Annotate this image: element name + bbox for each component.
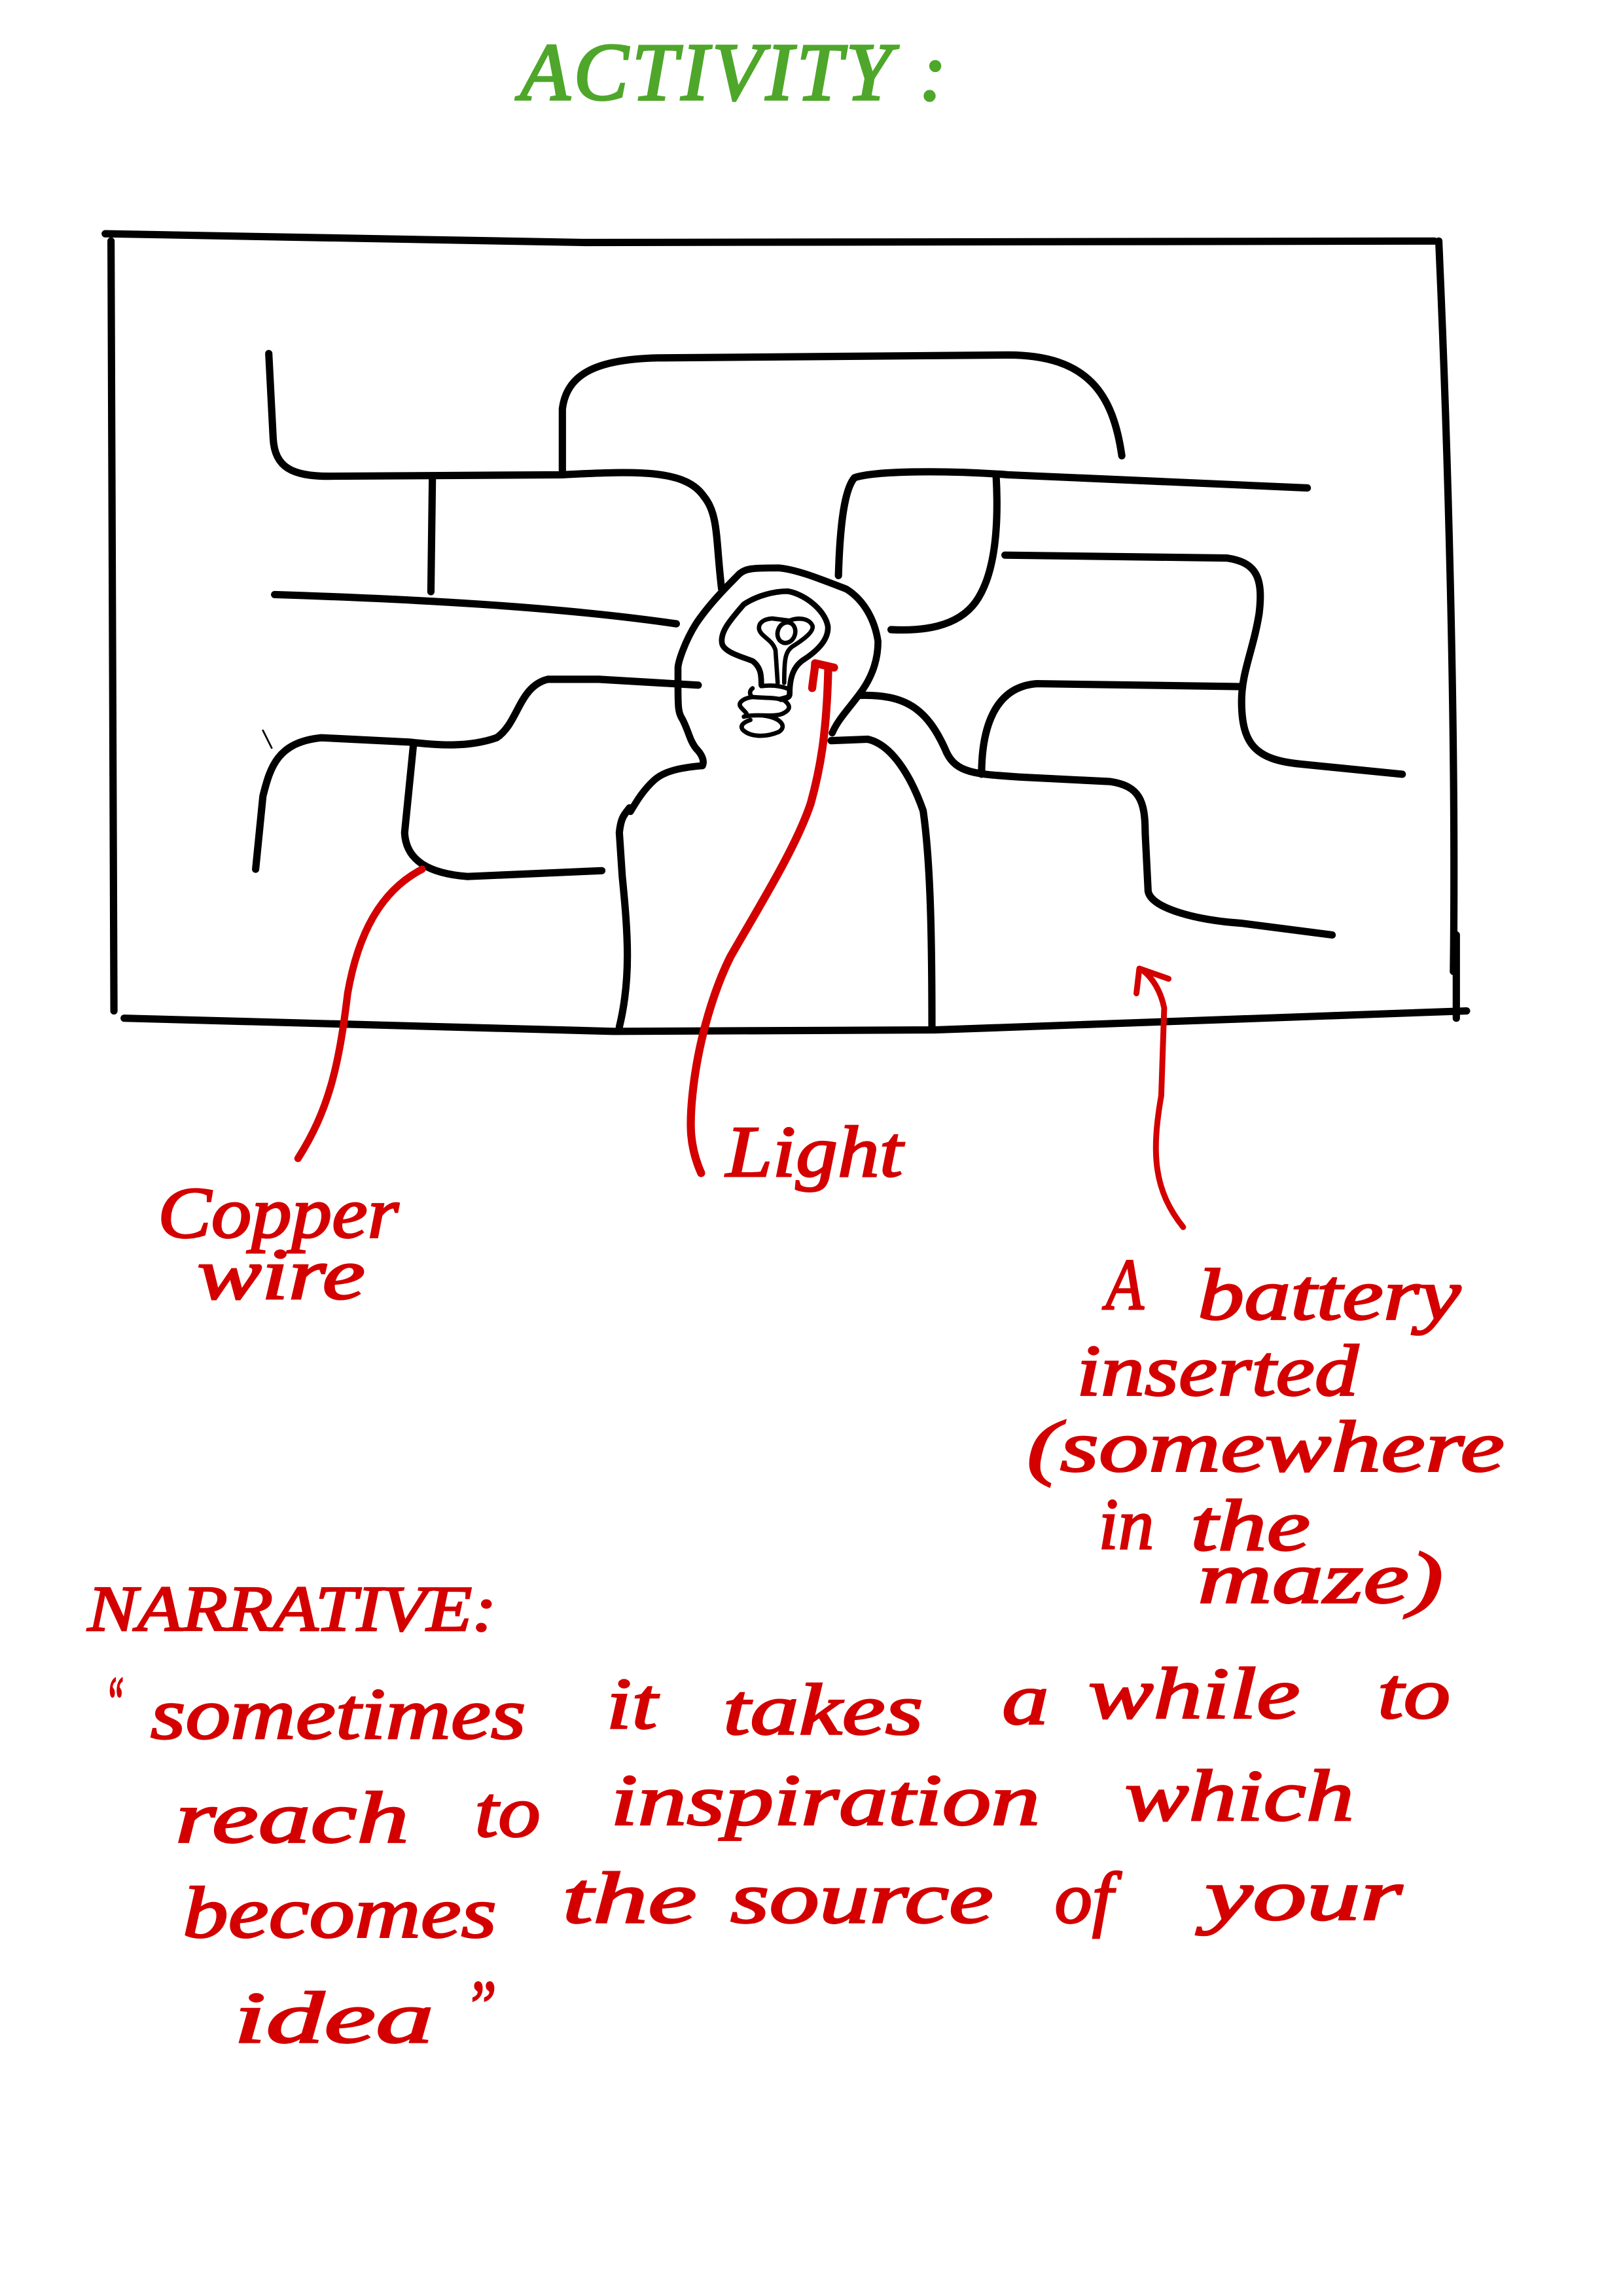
title: ACTIVITY: ACTIVITY : xyxy=(516,27,946,118)
arrow: copper wire pointer xyxy=(298,869,422,1158)
text block: narrative quote: while xyxy=(1088,1654,1300,1734)
label: battery note: A xyxy=(1102,1245,1144,1325)
arrow: light pointer xyxy=(690,663,834,1173)
icon: light bulb xyxy=(722,591,828,736)
panel: maze frame xyxy=(105,234,1467,1031)
text block: narrative quote: takes xyxy=(723,1670,923,1750)
text block: narrative quote: becomes xyxy=(183,1873,497,1954)
text block: narrative quote: sometimes xyxy=(151,1674,526,1755)
heading: narrative: NARRATIVE: xyxy=(87,1573,497,1645)
text block: narrative quote: to xyxy=(1378,1654,1450,1734)
text block: narrative quote: reach xyxy=(175,1778,409,1859)
label: copper wire: wire xyxy=(197,1234,365,1315)
label: battery note: inserted xyxy=(1077,1331,1359,1412)
label: light: Light xyxy=(724,1112,905,1193)
label: copper wire xyxy=(158,1174,399,1315)
text block: narrative quote: it xyxy=(606,1664,660,1744)
figure: body of person xyxy=(619,739,932,1027)
label: battery note: (somewhere xyxy=(1027,1407,1505,1488)
text block: narrative quote: idea xyxy=(234,1978,434,2058)
label: battery note: maze) xyxy=(1198,1539,1443,1619)
label: battery note xyxy=(1027,1245,1505,1619)
text block: narrative quote: your xyxy=(1196,1856,1403,1936)
text block: narrative quote: ” xyxy=(465,1966,497,2047)
maze: copper wire paths xyxy=(256,353,1402,935)
text block: narrative quote: inspiration xyxy=(611,1761,1040,1841)
text block: narrative quote: which xyxy=(1125,1756,1354,1837)
label: battery note: battery xyxy=(1198,1255,1461,1335)
text block: narrative quote xyxy=(105,1654,1450,2058)
text block: narrative quote: “ xyxy=(105,1662,124,1743)
text block: narrative quote: to xyxy=(474,1772,541,1853)
figure: head with light bulb xyxy=(630,568,878,812)
text block: narrative quote: a xyxy=(1002,1660,1049,1740)
label: battery note: in xyxy=(1098,1484,1154,1565)
text block: narrative quote: of xyxy=(1055,1858,1122,1939)
label: copper wire: Copper xyxy=(158,1174,399,1254)
arrow: battery pointer xyxy=(1136,969,1183,1227)
text block: narrative quote: source xyxy=(730,1858,993,1939)
text block: narrative quote: the xyxy=(562,1858,697,1939)
label: battery note: the xyxy=(1190,1486,1310,1566)
